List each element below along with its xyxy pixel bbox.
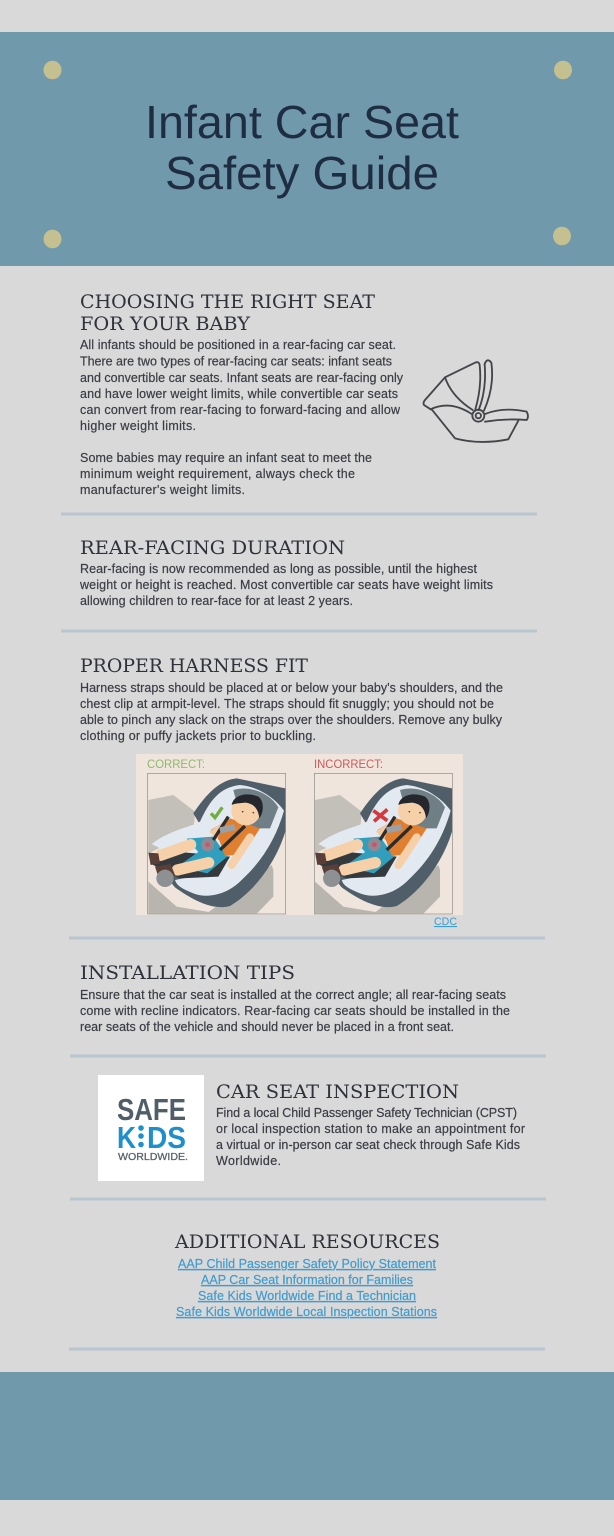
resource links	[176, 1257, 437, 1319]
text block: inspection	[216, 1106, 525, 1168]
panel: incorrect	[314, 757, 452, 914]
section: car seat inspection	[98, 1075, 525, 1181]
footer banner	[0, 1372, 614, 1500]
section: rear-facing duration	[79, 537, 493, 608]
text block: choosing: manufacturer's weight limits.	[80, 483, 245, 497]
text block: choosing: Some babies may require an infant seat to meet the	[80, 451, 372, 465]
resource links: AAP Child Passenger Safety Policy Statement	[178, 1257, 437, 1271]
icon: check mark	[211, 807, 222, 818]
panel: correct	[147, 757, 286, 914]
text block: inspection: Worldwide.	[216, 1154, 281, 1168]
text block: installation	[80, 988, 510, 1034]
text block: rear-facing: weight or height is reached. Most convertible car seats have weight limits	[79, 578, 493, 592]
resource links: Safe Kids Worldwide Local Inspection Stations	[176, 1305, 437, 1319]
header dots	[44, 61, 572, 248]
icon: infant car seat	[424, 360, 528, 442]
link: CDC: CDC	[434, 916, 457, 928]
title: Safety Guide	[165, 147, 439, 199]
text block: choosing: minimum weight requirement, always check the	[80, 467, 355, 481]
text block: harness	[80, 681, 503, 743]
logo: Safe Kids Worldwide: WORLDWIDE.	[118, 1151, 188, 1163]
section: installation tips	[80, 962, 510, 1034]
illustration: correct and incorrect harness	[136, 754, 463, 915]
logo: Safe Kids Worldwide: SAFE	[117, 1092, 186, 1127]
text block: installation: come with recline indicators. Rear-facing car seats should be installed in the	[80, 1004, 510, 1018]
text block: rear-facing	[79, 562, 493, 608]
heading: additional resources: ADDITIONAL RESOURCES	[174, 1231, 440, 1253]
text block: choosing: can convert from rear-facing to forward-facing and allow	[80, 403, 401, 417]
text block: installation: rear seats of the vehicle and should never be placed in a front seat.	[80, 1020, 454, 1034]
icon: red cross	[373, 809, 387, 821]
text block: choosing: All infants should be positioned in a rear-facing car seat.	[80, 338, 396, 352]
text block: choosing: and convertible car seats. Infant seats are rear-facing only	[80, 371, 404, 385]
heading: car seat inspection: CAR SEAT INSPECTION	[216, 1081, 459, 1103]
text block: choosing: higher weight limits.	[80, 419, 196, 433]
text block: inspection: Find a local Child Passenger Safety Technician (CPST)	[216, 1106, 517, 1120]
title	[145, 96, 459, 199]
logo: Safe Kids Worldwide: K	[117, 1120, 137, 1155]
section: additional resources	[174, 1231, 440, 1319]
logo: Safe Kids Worldwide: DS	[147, 1120, 186, 1155]
section: proper harness fit	[80, 655, 503, 928]
heading: choosing the right seat: FOR YOUR BABY	[80, 313, 250, 335]
title: Infant Car Seat	[145, 96, 459, 148]
heading: rear-facing duration: REAR-FACING DURATION	[80, 537, 345, 559]
resource links: AAP Car Seat Information for Families	[201, 1273, 413, 1287]
section: choosing the right seat	[80, 291, 528, 497]
text block: choosing: There are two types of rear-facing car seats: infant seats	[80, 354, 392, 368]
text block: rear-facing: allowing children to rear-face for at least 2 years.	[80, 594, 353, 608]
text block: installation: Ensure that the car seat is installed at the correct angle; all rear-facing seats	[80, 988, 506, 1002]
panel: incorrect: INCORRECT:	[314, 757, 383, 771]
text block: harness: Harness straps should be placed at or below your baby's shoulders, and the	[80, 681, 503, 695]
text block: harness: chest clip at armpit-level. The straps should fit snuggly; you should not be	[80, 697, 494, 711]
text block: harness: clothing or puffy jackets prior to buckling.	[80, 729, 316, 743]
text block: rear-facing: Rear-facing is now recommended as long as possible, until the highest	[80, 562, 478, 576]
heading: installation tips: INSTALLATION TIPS	[80, 962, 295, 984]
text block: choosing	[80, 338, 404, 497]
heading: choosing the right seat	[80, 291, 375, 335]
text block: inspection: or local inspection station to make an appointment for	[216, 1122, 525, 1136]
logo: Safe Kids Worldwide	[98, 1075, 204, 1181]
heading: proper harness fit: PROPER HARNESS FIT	[80, 655, 308, 677]
heading: choosing the right seat: CHOOSING THE RIGHT SEAT	[80, 291, 375, 313]
text block: inspection: a virtual or in-person car seat check through Safe Kids	[216, 1138, 520, 1152]
text block: choosing: and have lower weight limits, while convertible car seats	[80, 387, 398, 401]
text block: harness: able to pinch any slack on the straps over the shoulders. Remove any bulky	[80, 713, 503, 727]
resource links: Safe Kids Worldwide Find a Technician	[198, 1289, 416, 1303]
header banner	[0, 32, 614, 266]
panel: correct: CORRECT:	[147, 757, 205, 771]
